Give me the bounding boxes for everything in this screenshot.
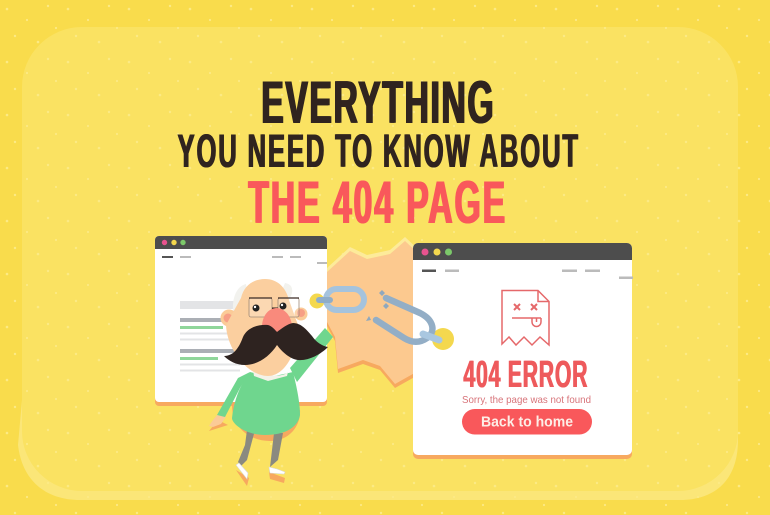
right arm	[290, 328, 333, 382]
head	[226, 279, 298, 376]
eyes	[252, 302, 286, 312]
back to home button: Back to home	[481, 414, 573, 430]
right browser window	[413, 243, 633, 459]
collar	[253, 370, 288, 381]
title	[177, 69, 579, 236]
legs	[238, 430, 283, 467]
character: old man with mustache	[209, 279, 333, 486]
error message: Sorry, the page was not found	[462, 394, 591, 406]
shoes	[236, 463, 285, 479]
title line 1: EVERYTHING	[261, 69, 495, 136]
nose	[262, 308, 292, 333]
title line 2: YOU NEED TO KNOW ABOUT	[177, 125, 579, 178]
icon: sad 404 document	[502, 290, 549, 345]
left browser window	[155, 236, 327, 406]
left chain piece	[310, 289, 364, 310]
broken chain link	[310, 289, 454, 350]
starburst behind broken link	[327, 237, 420, 388]
orange shadows	[232, 405, 300, 441]
404 error heading: 404 ERROR	[463, 354, 588, 396]
green sweater	[232, 372, 300, 435]
right chain piece	[366, 290, 454, 350]
left hand	[209, 414, 226, 427]
left arm	[217, 372, 250, 417]
back to home button	[462, 409, 592, 434]
ears	[220, 310, 238, 326]
glasses	[249, 298, 299, 317]
mustache	[224, 323, 328, 365]
title line 3: THE 404 PAGE	[248, 169, 507, 236]
white hair	[233, 283, 292, 312]
